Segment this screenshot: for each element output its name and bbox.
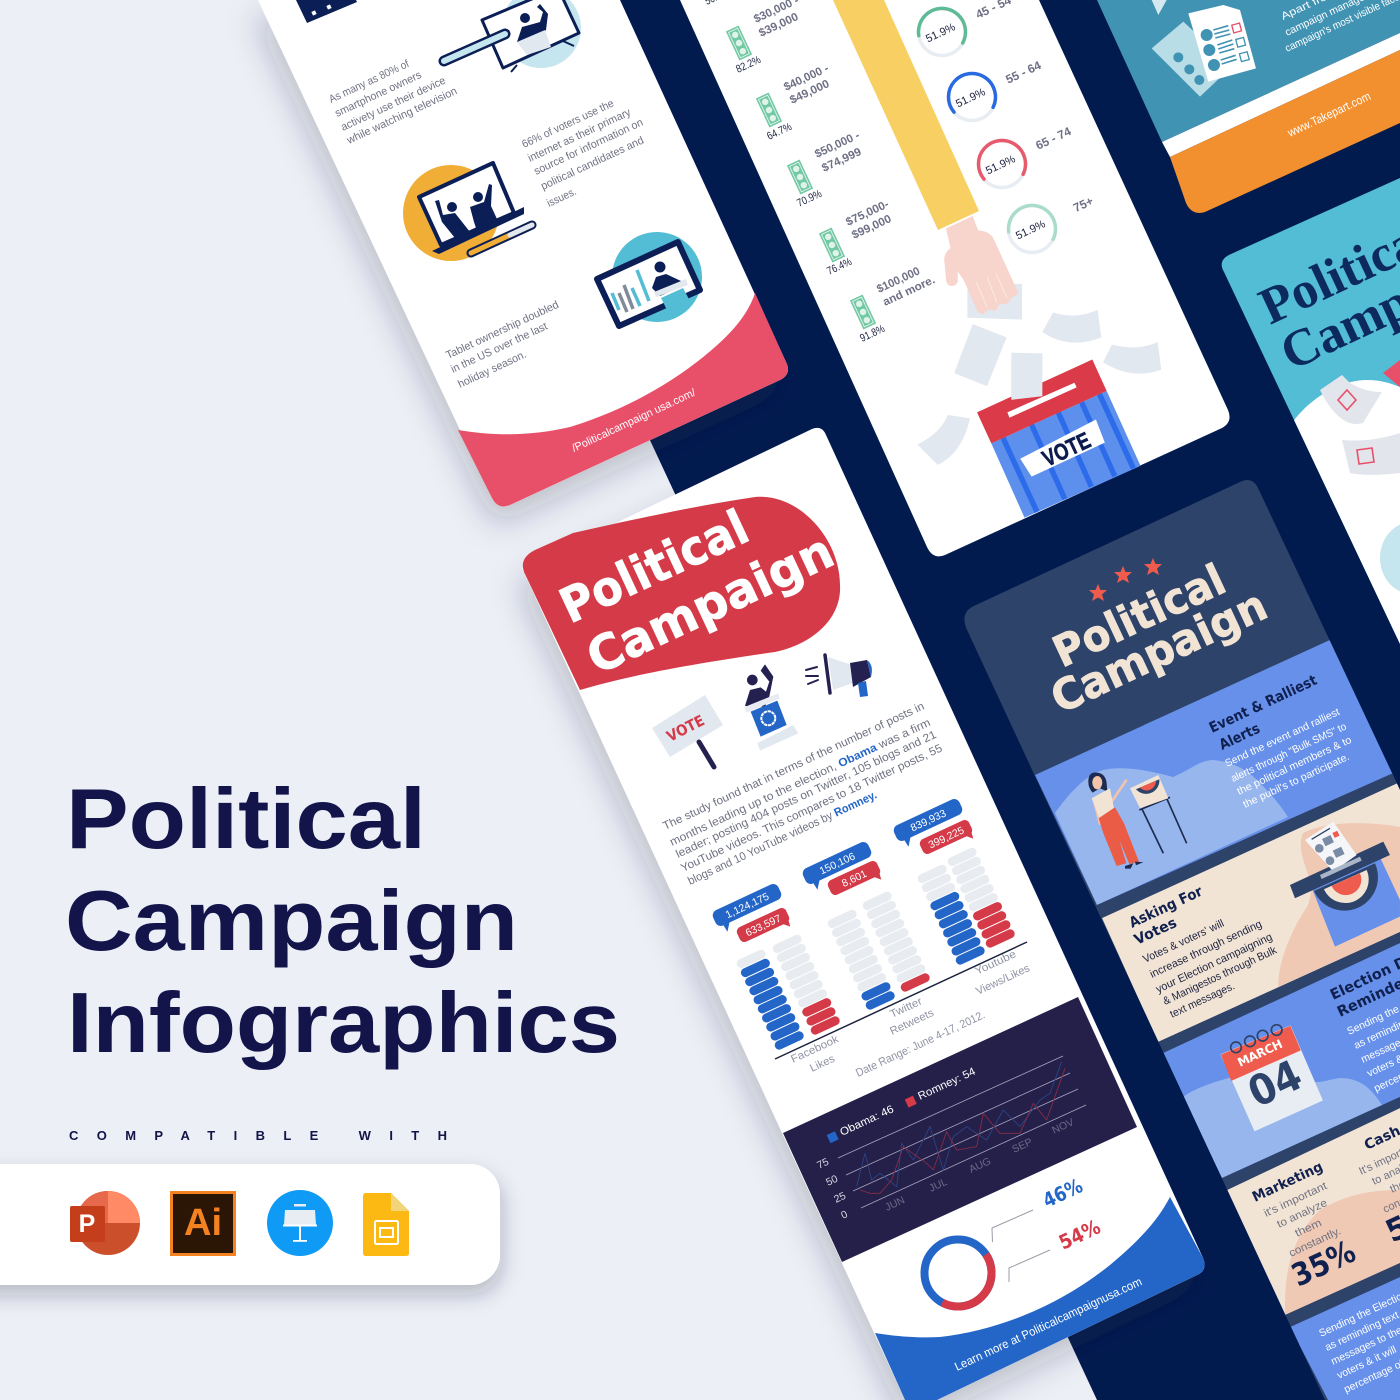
chart baseline <box>775 942 1027 1059</box>
panel: slab serif card <box>1222 178 1400 644</box>
marketing stat: constantly. <box>1287 1225 1343 1260</box>
youtube romney bars <box>946 846 1016 949</box>
peach blob: band two <box>1278 823 1400 987</box>
study paragraph: months leading up to the election, Obama was a firm <box>668 717 932 849</box>
asking for votes text: text messages. <box>1168 980 1237 1021</box>
range: 30-39k: $39,000 <box>757 11 800 40</box>
panel: app icons <box>0 1164 500 1285</box>
donut chart: 54% <box>1055 1215 1104 1255</box>
icon: television <box>444 0 581 72</box>
hand <box>944 216 1018 314</box>
blue band five <box>1290 1277 1400 1400</box>
axis labels: Facebook <box>789 1033 841 1066</box>
icon: speaker at podium <box>744 664 798 751</box>
y axis labels: 75 <box>815 1156 831 1172</box>
icon: illustrator <box>172 1192 234 1254</box>
teal body <box>1222 178 1400 644</box>
callout: 8,601: 8,601 <box>840 868 869 890</box>
navy header <box>950 470 1400 1400</box>
card body <box>680 0 1230 556</box>
callout: 839,933: 839,933 <box>909 807 948 834</box>
callout: 150,106 <box>801 840 876 893</box>
text: tablet ownership <box>444 299 561 391</box>
event alerts text: Send the event and ralliest <box>1223 706 1342 770</box>
icon: powerpoint <box>70 1191 140 1255</box>
text: smartphone owners: As many as 80% of <box>327 58 412 106</box>
ring values and ages: 65 - 74 <box>1033 124 1073 153</box>
ring values and ages: 51.9% <box>924 21 958 45</box>
teal body <box>1097 0 1400 142</box>
x axis labels <box>883 1116 1076 1214</box>
y axis labels: 25 <box>832 1190 848 1206</box>
icon: calendar <box>1222 1025 1322 1130</box>
panel: volunteer card <box>1097 0 1400 213</box>
beige band four <box>1227 1108 1400 1315</box>
red title shape <box>523 497 840 690</box>
y axis labels: 50 <box>824 1173 840 1189</box>
text: voters internet: source for information on <box>532 117 645 178</box>
x axis labels: JUL <box>927 1176 949 1195</box>
red banner point <box>1383 360 1400 387</box>
range: 100k plus <box>850 265 937 345</box>
icon: tablet <box>597 232 702 326</box>
callout: 1,124,175: 1,124,175 <box>724 891 771 921</box>
main heading: Political <box>66 772 426 867</box>
range: 40-49k: 64.7% <box>765 121 794 143</box>
range: 50-74k: $74,999 <box>820 146 863 175</box>
marketing stat: to analyze <box>1275 1197 1329 1231</box>
leader lines <box>992 1210 1033 1242</box>
footer url: www.Takepart.com <box>1285 89 1373 140</box>
text: smartphone owners: while watching television <box>344 85 459 147</box>
range: 40-49k: $49,000 <box>788 78 831 107</box>
range: 75-99k: 76.4% <box>825 256 854 278</box>
date range note: Date Range: June 4-17, 2012. <box>854 1009 987 1080</box>
marketing stat: them <box>1293 1217 1324 1240</box>
ring 45-54 <box>918 8 966 56</box>
bar chart: supporter counts <box>711 797 1032 1075</box>
ballot petal one <box>1320 375 1382 424</box>
callout: 150,106: 150,106 <box>818 850 857 877</box>
election reminder text <box>1330 958 1400 1094</box>
legend <box>827 1066 977 1143</box>
text: smartphone owners: activety use their device <box>339 75 448 134</box>
orange footer <box>1170 50 1400 213</box>
ring values and ages: 51.9% <box>1014 218 1048 242</box>
white curved area <box>1292 380 1400 660</box>
yellow sleeve <box>833 0 979 230</box>
range: 100k plus: and more. <box>881 274 937 309</box>
illustration: woman at easel <box>1088 773 1187 869</box>
main heading: Infographics <box>67 976 620 1071</box>
callout: 1,124,175 <box>711 882 786 935</box>
range: 50-74k <box>787 129 863 210</box>
ring values and ages <box>924 0 1095 242</box>
facebook obama bars <box>735 948 805 1051</box>
twitter romney bars <box>861 890 931 993</box>
title: Campaign <box>578 523 842 686</box>
panel: screens card <box>258 0 788 506</box>
x axis labels: JUN <box>883 1194 907 1214</box>
ring 75+ <box>1008 205 1056 252</box>
panel: main political campaign card <box>522 428 1205 1400</box>
icon: illustrator: Ai <box>184 1202 222 1244</box>
ballot box: VOTE <box>1038 427 1094 472</box>
range: 100k plus: $100,000 <box>875 265 922 296</box>
ring values and ages: 55 - 64 <box>1003 58 1043 87</box>
divider strips <box>1097 770 1400 1327</box>
axis labels: Likes <box>808 1053 837 1075</box>
callout: 839,933 <box>892 797 967 850</box>
callout: 399,225: 399,225 <box>927 824 966 851</box>
election reminder text: Sending the <box>1345 1003 1400 1038</box>
ring values and ages: 75+ <box>1071 194 1095 215</box>
range: 40-49k: $40,000 - <box>782 62 831 94</box>
main heading: Campaign <box>65 874 518 969</box>
study paragraph: leader; posting 404 posts on Twitter, 105 blogs and 21 <box>674 729 938 861</box>
footer url: /Politicalcampaign usa.com/ <box>570 386 698 455</box>
blob: band one <box>1055 760 1288 905</box>
blue band one <box>1035 639 1400 905</box>
callout: 633,597 <box>735 906 793 948</box>
stars <box>1089 558 1162 601</box>
x axis labels: NOV <box>1050 1116 1076 1137</box>
y axis labels: 0 <box>839 1208 850 1222</box>
marketing stat: 35% <box>1286 1234 1361 1294</box>
icon: vote sign: VOTE <box>664 711 707 746</box>
cash stat <box>1358 1127 1400 1241</box>
callout: 399,225 <box>918 818 976 860</box>
youtube obama bars <box>916 863 986 966</box>
event alerts text: Event & Ralliest <box>1207 673 1320 737</box>
icon: vote sign <box>652 695 723 767</box>
age rings <box>918 8 1056 252</box>
axis labels: Retweets <box>888 1007 936 1038</box>
icon: voter documents <box>1152 0 1256 97</box>
study paragraph <box>661 701 944 888</box>
event alerts text <box>1207 673 1354 811</box>
range: 75-99k <box>819 198 893 278</box>
legend: Obama: 46 <box>838 1103 896 1139</box>
x axis labels: AUG <box>967 1155 993 1176</box>
icon: keynote <box>267 1190 333 1256</box>
range: 50-74k: 70.9% <box>795 188 824 210</box>
range: 30-39k <box>726 0 801 76</box>
card body <box>522 428 1205 1400</box>
icon: phone <box>296 0 357 23</box>
x axis labels: SEP <box>1010 1136 1034 1156</box>
navy backdrop band <box>445 0 1400 1400</box>
compatible with label: COMPATIBLE WITH <box>69 1128 447 1143</box>
range: 100k plus: 91.8% <box>858 323 887 345</box>
icon: google slides <box>363 1193 409 1256</box>
beige band two <box>1102 782 1400 1042</box>
title: Campaign <box>1044 581 1275 724</box>
event alerts text: the pubil's to participate. <box>1241 751 1351 811</box>
asking for votes text: & Manigestos through Bulk <box>1161 944 1279 1008</box>
ballot box <box>977 353 1141 518</box>
range: 75-99k: $99,000 <box>850 213 893 242</box>
text: voters internet: political candidates and <box>539 135 646 193</box>
axis labels: Youtube <box>973 948 1018 978</box>
red footer <box>458 293 788 506</box>
study paragraph: YouTube videos. This compares to 18 Twitter posts, 55 <box>679 743 944 875</box>
ballot petal two <box>1342 433 1400 475</box>
footer link: Learn more at Politicalcampaignusa.com <box>952 1274 1144 1374</box>
facebook romney bars <box>771 933 841 1036</box>
axis labels <box>789 948 1032 1075</box>
main heading <box>65 772 620 1071</box>
legend: Romney: 54 <box>916 1066 977 1103</box>
line series <box>857 1062 1065 1193</box>
icon: calendar: MARCH <box>1235 1037 1285 1070</box>
icon: powerpoint: P <box>79 1210 95 1238</box>
blue band three <box>1163 943 1400 1178</box>
text: tablet ownership: Tablet ownership doubled <box>444 299 561 362</box>
title: Political <box>1046 555 1233 678</box>
ballots <box>917 284 1161 465</box>
y axis labels <box>815 1156 850 1222</box>
text: tablet ownership: in the US over the last <box>449 320 549 376</box>
ring values and ages: 51.9% <box>954 86 988 110</box>
panel: income and ballot card <box>680 0 1230 556</box>
icon: calendar: 04 <box>1241 1050 1309 1117</box>
text: tablet ownership: holiday season. <box>456 349 528 391</box>
twitter obama bars <box>826 908 896 1011</box>
ring values and ages: 51.9% <box>984 153 1018 177</box>
donut chart <box>924 1173 1104 1307</box>
grid lines <box>838 1056 1086 1208</box>
asking for votes text: your Election campaigning <box>1154 931 1274 996</box>
range: 40-49k <box>756 62 831 143</box>
callout: 633,597: 633,597 <box>744 912 783 939</box>
study paragraph: The study found that in terms of the number of posts in <box>661 701 926 833</box>
card body <box>258 0 788 506</box>
blob: band three <box>1183 1072 1382 1178</box>
ring 65-74 <box>978 140 1026 188</box>
text: voters internet <box>520 98 646 210</box>
icon: megaphone <box>806 655 872 697</box>
event alerts text: the political members & to <box>1235 734 1354 798</box>
axis labels: Views/Likes <box>974 962 1032 998</box>
asking for votes text: Asking For <box>1127 883 1206 932</box>
white strip <box>1162 33 1400 157</box>
icon: laptop <box>403 163 532 261</box>
illustration: ballot drop <box>1290 822 1400 947</box>
callout: 8,601 <box>826 859 884 901</box>
ring 55-64 <box>948 73 996 120</box>
marketing stat: Marketing <box>1250 1159 1326 1206</box>
marketing stat <box>1252 1163 1356 1286</box>
peach blob: band four <box>1285 1190 1400 1315</box>
text: smartphone owners <box>327 58 459 147</box>
income column <box>703 0 937 345</box>
asking for votes text: Votes <box>1132 915 1179 949</box>
closing text: as reminding text <box>1323 1309 1400 1354</box>
title: Political <box>551 499 757 635</box>
closing text: voters & it will <box>1335 1344 1398 1382</box>
marketing stat: it's important <box>1262 1180 1329 1220</box>
axis labels: Twitter <box>888 995 924 1021</box>
range: 75-99k: $75,000- <box>844 198 891 229</box>
event alerts text: Alerts <box>1217 721 1263 754</box>
panel: sms campaign card <box>950 470 1400 1400</box>
footer: blue wave <box>875 1197 1205 1400</box>
percentages: 46% <box>1039 1173 1086 1213</box>
text: smartphone owners: smartphone owners <box>333 69 424 120</box>
text: voters internet: internet as their primary <box>526 106 633 165</box>
text: voters internet: 66% of voters use the <box>520 98 616 151</box>
text: voters internet: issues. <box>545 186 578 210</box>
range: 30-39k: 82.2% <box>734 54 763 76</box>
asking for votes text <box>1127 883 1279 1021</box>
pale blue circle <box>1380 522 1400 594</box>
event alerts text: alerts through "Bulk SMS" to <box>1229 721 1349 785</box>
panel: line chart <box>783 997 1137 1262</box>
asking for votes text: increase through sending <box>1148 918 1264 981</box>
range: 50-74k: $50,000 - <box>813 129 862 161</box>
asking for votes text: Votes & voters' will <box>1141 918 1226 966</box>
study paragraph: blogs and 10 YouTube videos by Romney. <box>686 789 879 888</box>
closing text <box>1317 1288 1400 1396</box>
